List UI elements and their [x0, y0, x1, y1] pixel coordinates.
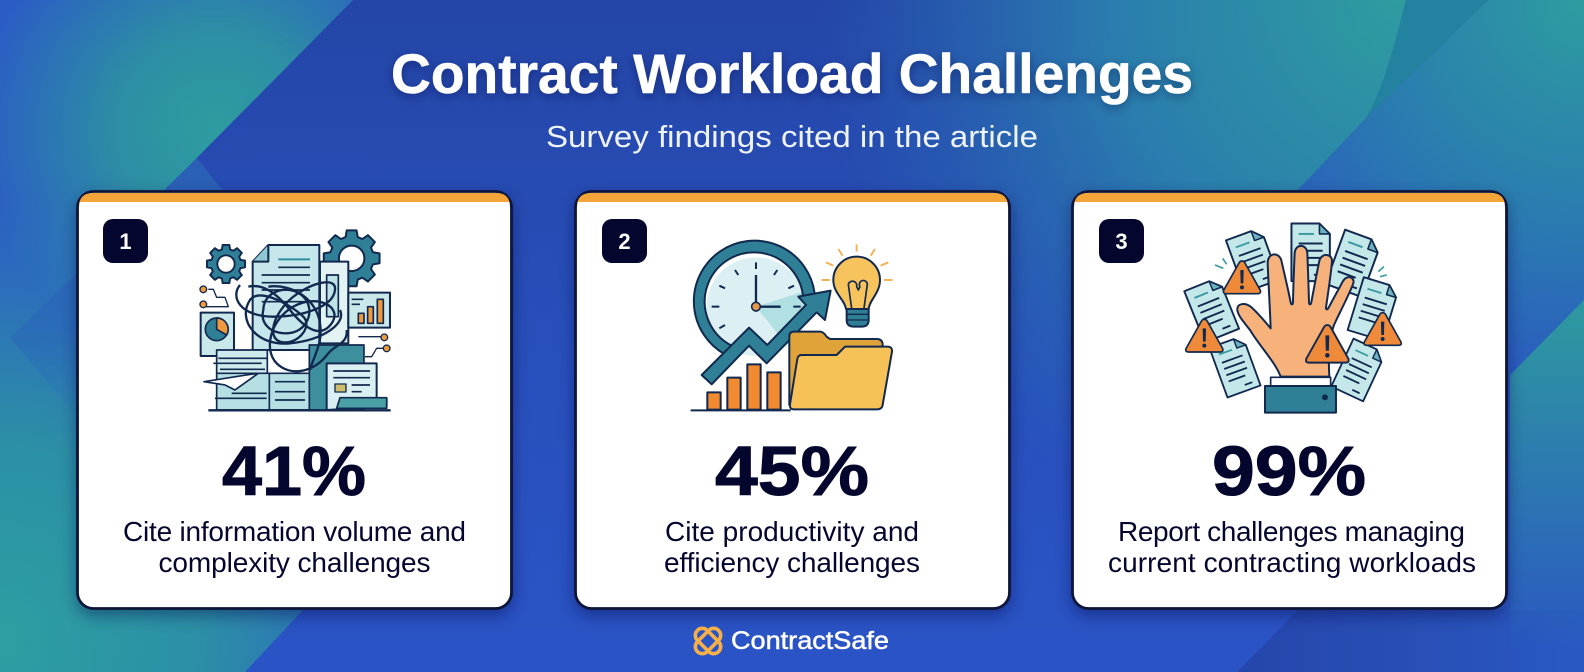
icon: tangled documents: [200, 230, 391, 410]
panel: productivity: [576, 192, 1010, 608]
number badge 3: [1099, 219, 1144, 263]
description: complexity challenges: [158, 547, 430, 578]
icon: clock, growth arrow, lightbulb and folder: [691, 241, 893, 410]
title: Contract Workload Challenges: [391, 42, 1193, 105]
card accent bar: [1074, 193, 1505, 207]
icon: hand holding back documents and warnings: [1184, 224, 1401, 413]
number badge 2: 2: [618, 229, 631, 254]
description: current contracting workloads: [1108, 547, 1476, 578]
statistic 41%: 41%: [222, 432, 366, 510]
number badge 2: [602, 219, 647, 263]
card frame: [78, 192, 512, 608]
card accent bar: [79, 193, 510, 207]
subtitle: Survey findings cited in the article: [546, 119, 1038, 154]
card accent bar: [577, 193, 1008, 207]
description: Cite productivity and: [665, 516, 919, 547]
number badge 1: [103, 219, 148, 263]
number badge 3: 3: [1115, 229, 1128, 254]
statistic 99%: 99%: [1212, 432, 1366, 510]
wordmark: ContractSafe: [731, 627, 889, 655]
number badge 1: 1: [119, 229, 132, 254]
panel: information volume: [78, 192, 512, 608]
description: efficiency challenges: [664, 547, 920, 578]
card frame: [576, 192, 1010, 608]
card frame: [1072, 192, 1506, 608]
description: Report challenges managing: [1118, 516, 1465, 547]
icon: logo mark: [692, 625, 724, 657]
panel: workload: [1072, 192, 1506, 608]
statistic 45%: 45%: [715, 432, 869, 510]
logo: ContractSafe: [692, 625, 889, 657]
description: Cite information volume and: [123, 516, 466, 547]
